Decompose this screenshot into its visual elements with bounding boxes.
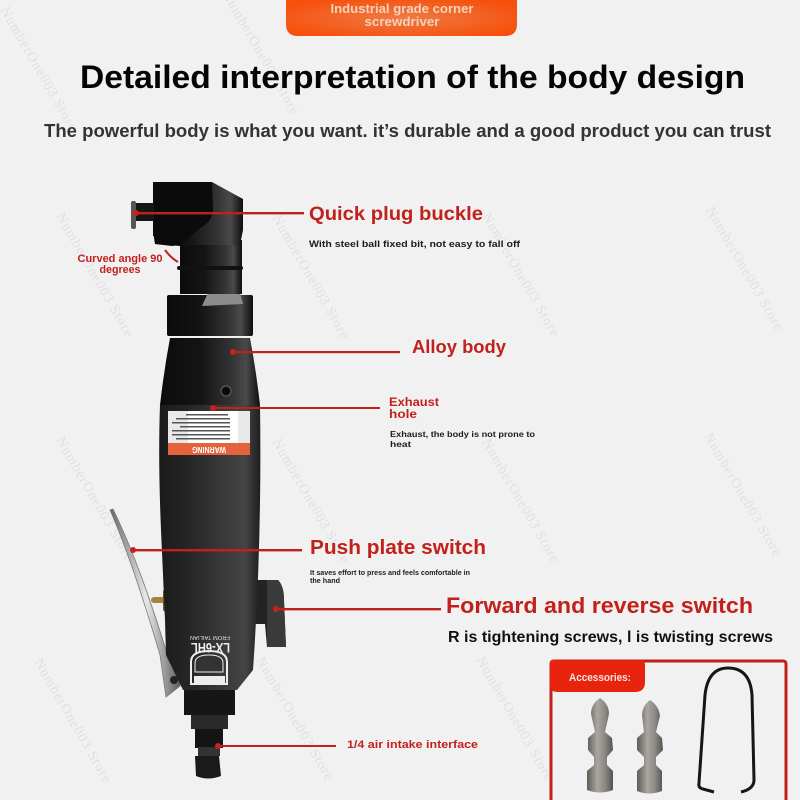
callout: push plate switch: Push plate switch xyxy=(310,537,486,559)
watermarks: NumberOne003 Store xyxy=(703,204,786,334)
air inlet coupling xyxy=(184,688,235,778)
exhaust port xyxy=(221,386,231,396)
watermarks: NumberOne003 Store xyxy=(53,434,136,564)
watermarks: NumberOne003 Store xyxy=(479,210,562,340)
illustration: corner screwdriver xyxy=(110,182,286,778)
callout: exhaust hole xyxy=(210,395,535,449)
panel: accessories xyxy=(550,660,786,800)
accessories tag: Accessories: xyxy=(569,672,631,684)
callout: exhaust hole: heat xyxy=(390,439,411,449)
icon: screwdriver bit 2 xyxy=(637,700,663,794)
top banner: screwdriver xyxy=(364,15,440,29)
callout: air intake interface: 1/4 air intake interface xyxy=(347,739,478,751)
warning label: WARNING xyxy=(192,445,226,454)
callout: quick plug buckle xyxy=(133,204,521,249)
top banner: Industrial grade corner xyxy=(330,2,474,16)
neck and collar xyxy=(177,240,243,294)
callout: curved angle: degrees xyxy=(100,264,140,276)
watermarks: NumberOne003 Store xyxy=(53,210,136,340)
icon: wire clip xyxy=(699,668,754,792)
callout: quick plug buckle: With steel ball fixed bit, not easy to fall off xyxy=(309,239,521,249)
callout: curved angle xyxy=(78,250,178,276)
callout: exhaust hole: Exhaust xyxy=(389,395,439,409)
forward and reverse knob xyxy=(245,580,286,647)
upper body xyxy=(160,338,260,405)
angled head xyxy=(131,182,243,246)
brand logo: LX-6HL xyxy=(191,640,230,656)
brass pin xyxy=(151,589,171,612)
callout: push plate switch xyxy=(130,537,486,585)
callout: alloy body: Alloy body xyxy=(412,337,506,357)
trigger lever xyxy=(110,509,182,697)
top banner xyxy=(286,0,517,36)
callout: forward and reverse switch: R is tightening screws, l is twisting screws xyxy=(448,629,773,646)
callout: alloy body xyxy=(230,337,506,357)
brand logo: FROM TAILIAN xyxy=(190,634,230,640)
watermarks: NumberOne003 Store xyxy=(269,436,352,566)
callout: exhaust hole: hole xyxy=(389,407,417,421)
subtitle: The powerful body is what you want. it’s durable and a good product you can trust xyxy=(44,121,771,141)
watermarks: NumberOne003 Store xyxy=(473,654,556,784)
callout: forward and reverse switch xyxy=(273,593,773,646)
icon: screwdriver bit 1 xyxy=(587,698,613,792)
watermarks: NumberOne003 Store xyxy=(269,212,352,342)
callout: push plate switch: It saves effort to press and feels comfortable in xyxy=(310,570,470,577)
callout: quick plug buckle: Quick plug buckle xyxy=(309,204,483,225)
watermarks: NumberOne003 Store xyxy=(479,436,562,566)
hex nut xyxy=(167,293,253,336)
brand logo xyxy=(190,634,230,684)
callout: curved angle: Curved angle 90 xyxy=(78,253,162,265)
warning label xyxy=(168,411,250,455)
watermarks: NumberOne003 Store xyxy=(31,656,114,786)
grip body xyxy=(159,405,260,690)
callout: exhaust hole: Exhaust, the body is not prone to xyxy=(390,429,535,439)
accessories tag xyxy=(550,660,645,692)
title: Detailed interpretation of the body design xyxy=(80,59,745,95)
callout: push plate switch: the hand xyxy=(310,578,340,585)
watermarks: NumberOne003 Store xyxy=(701,430,784,560)
watermarks: NumberOne003 Store xyxy=(253,654,336,784)
callout: forward and reverse switch: Forward and reverse switch xyxy=(446,593,753,618)
callout: air intake interface xyxy=(215,739,478,751)
